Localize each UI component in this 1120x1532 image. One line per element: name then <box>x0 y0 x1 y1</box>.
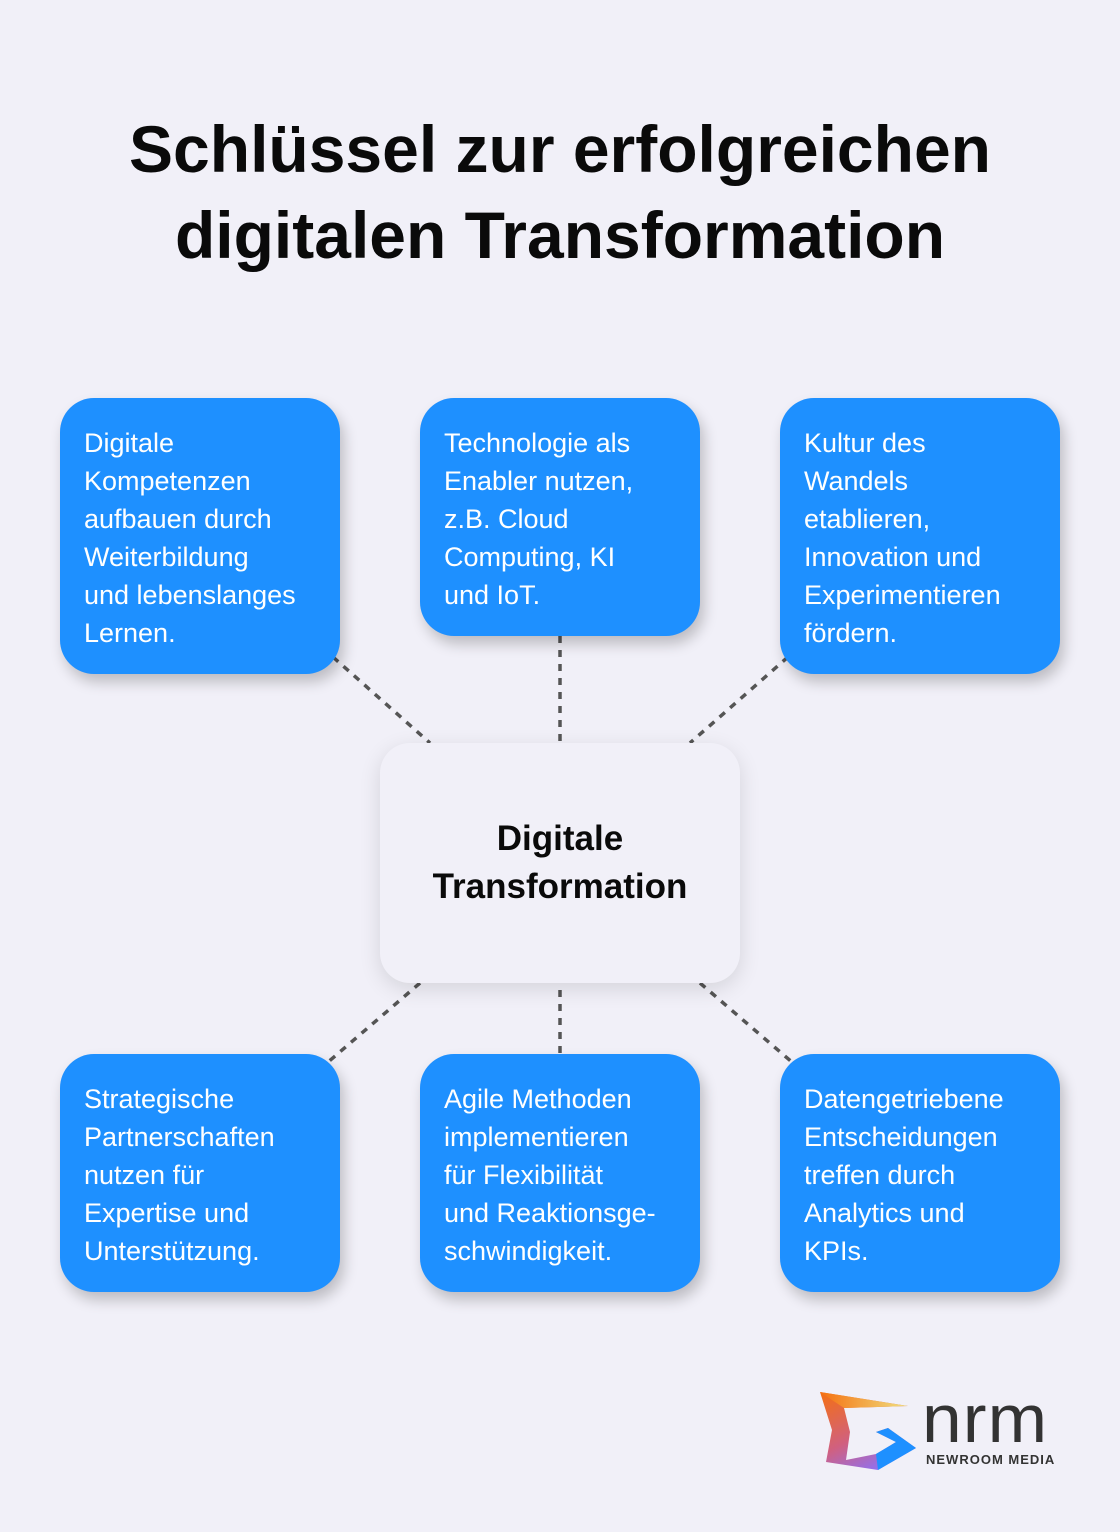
logo: nrm <box>922 1381 1048 1457</box>
box: Agile: schwindigkeit. <box>444 1236 612 1266</box>
box: Kompetenzen: aufbauen durch <box>84 504 272 534</box>
box: Kultur <box>780 398 1060 674</box>
title: Schlüssel zur erfolgreichen <box>129 112 991 186</box>
title: digitalen Transformation <box>175 198 945 272</box>
box: Daten: KPIs. <box>804 1236 869 1266</box>
box: Agile: Agile Methoden <box>444 1084 632 1114</box>
box: Partnerschaften: Strategische <box>84 1084 234 1114</box>
box: Kompetenzen: Digitale <box>84 428 174 458</box>
center: Digitale Transformation: Transformation <box>433 867 687 906</box>
box: Kultur: Wandels <box>804 466 908 496</box>
box: Daten: Analytics und <box>804 1198 965 1228</box>
logo <box>820 1381 1055 1470</box>
logo: NEWROOM MEDIA <box>926 1452 1055 1467</box>
box: Agile: implementieren <box>444 1122 629 1152</box>
box: Partnerschaften: Unterstützung. <box>84 1236 260 1266</box>
box: Technologie: Enabler nutzen, <box>444 466 633 496</box>
box: Technologie: z.B. Cloud <box>444 504 569 534</box>
box: Partnerschaften: nutzen für <box>84 1160 204 1190</box>
box: Partnerschaften <box>60 1054 340 1292</box>
box: Partnerschaften: Partnerschaften <box>84 1122 275 1152</box>
box: Partnerschaften: Expertise und <box>84 1198 249 1228</box>
title <box>129 112 991 272</box>
box: Kultur: etablieren, <box>804 504 930 534</box>
box: Agile: für Flexibilität <box>444 1160 603 1190</box>
box: Daten: Entscheidungen <box>804 1122 998 1152</box>
box: Kompetenzen: Weiterbildung <box>84 542 249 572</box>
box: Daten: Datengetriebene <box>804 1084 1004 1114</box>
center: Digitale Transformation: Digitale <box>497 819 623 858</box>
box: Kultur: Innovation und <box>804 542 981 572</box>
box: Kompetenzen: Kompetenzen <box>84 466 251 496</box>
box: Technologie: Computing, KI <box>444 542 615 572</box>
box: Kompetenzen: und lebenslanges <box>84 580 296 610</box>
box: Agile: und Reaktionsge- <box>444 1198 656 1228</box>
box: Technologie: Technologie als <box>444 428 630 458</box>
box: Daten: treffen durch <box>804 1160 955 1190</box>
box: Agile <box>420 1054 700 1292</box>
box: Kultur: Experimentieren <box>804 580 1001 610</box>
box: Kompetenzen <box>60 398 340 674</box>
box: Technologie <box>420 398 700 636</box>
box: Technologie: und IoT. <box>444 580 540 610</box>
center: Digitale Transformation <box>380 743 740 983</box>
box: Daten <box>780 1054 1060 1292</box>
box: Kultur: Kultur des <box>804 428 926 458</box>
box: Kultur: fördern. <box>804 618 897 648</box>
box: Kompetenzen: Lernen. <box>84 618 176 648</box>
